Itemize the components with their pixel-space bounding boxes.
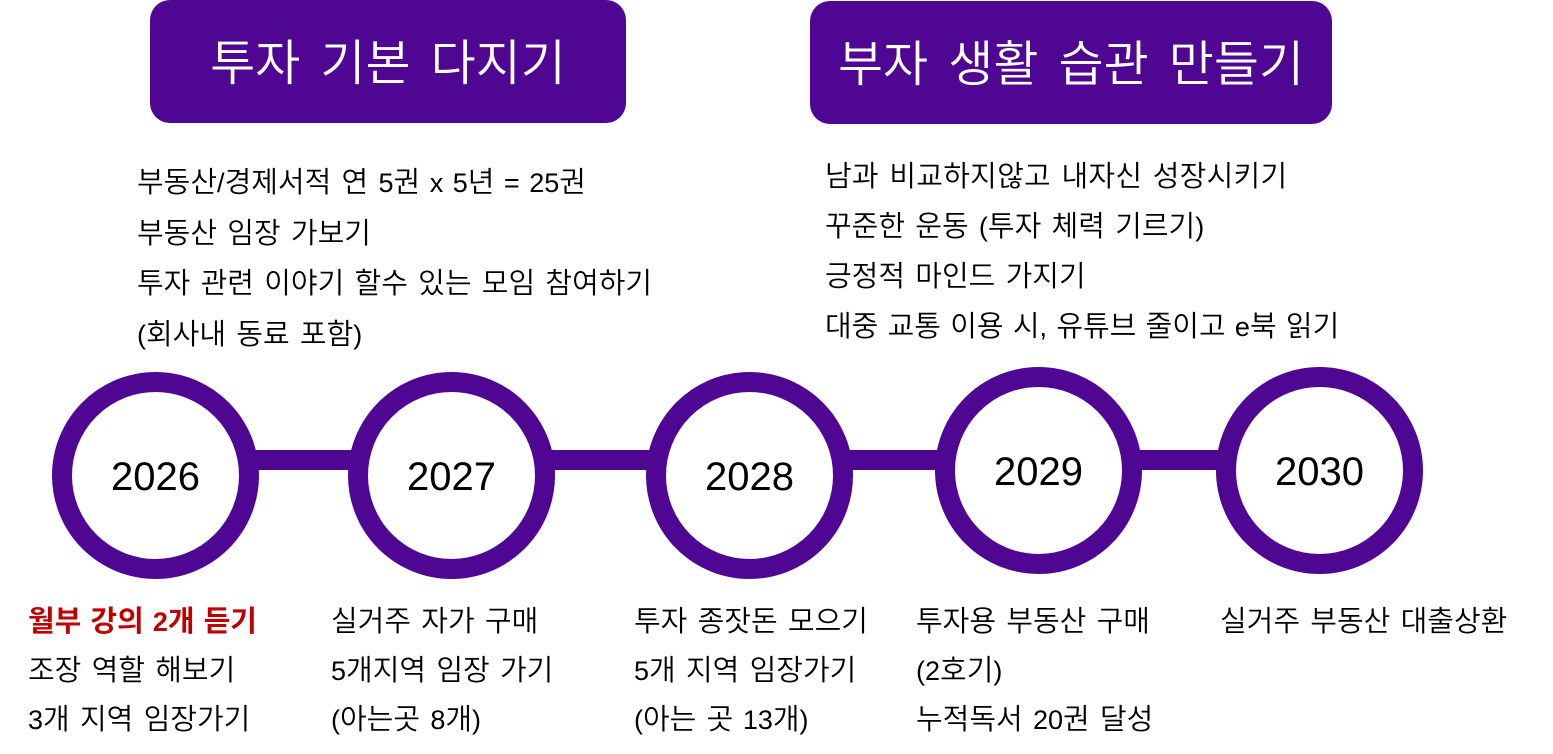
heading: 부자 생활 습관 만들기: 부자 생활 습관 만들기 (838, 38, 1304, 92)
circle: 2026: 2026 (111, 455, 200, 499)
circle: 2028 (646, 372, 853, 579)
circle: 2030: 2030 (1275, 450, 1364, 494)
circle: 2027: 2027 (407, 455, 496, 499)
text block: basics list: 부동산/경제서적 연 5권 x 5년 = 25권 부동산 임장 가보기 투자 관련 이야기 할수 있는 모임 참여하기 (회사내 동료 포함) (137, 167, 652, 351)
circle: 2029: 2029 (994, 450, 1083, 494)
connector 2029-2030 (1135, 450, 1225, 470)
text block: habits list: 남과 비교하지않고 내자신 성장시키기 꾸준한 운동 (투자 체력 기르기) 긍정적 마인드 가지기 대중 교통 이용 시, 유튜브 줄이고 e북 읽기 (825, 161, 1339, 343)
circle: 2030 (1216, 367, 1423, 574)
text block: 2026 goals: 월부 강의 2개 듣기 조장 역할 해보기 3개 지역 임장가기 (28, 606, 257, 736)
connector 2028-2029 (845, 450, 945, 470)
circle: 2026 (52, 372, 259, 579)
heading: 투자 기본 다지기: 투자 기본 다지기 (210, 37, 566, 91)
circle: 2029 (935, 367, 1142, 574)
text block: 2030 goals: 실거주 부동산 대출상환 (1220, 606, 1507, 638)
circle: 2027 (348, 372, 555, 579)
heading: 투자 기본 다지기 (150, 0, 626, 123)
circle: 2028: 2028 (705, 455, 794, 499)
heading: 부자 생활 습관 만들기 (810, 1, 1332, 124)
connector 2026-2027 (250, 450, 360, 470)
connector 2027-2028 (545, 450, 655, 470)
text block: 2027 goals: 실거주 자가 구매 5개지역 임장 가기 (아는곳 8개) (331, 606, 553, 736)
text block: 2029 goals: 투자용 부동산 구매 (2호기) 누적독서 20권 달성 (916, 606, 1153, 736)
text block: 2028 goals: 투자 종잣돈 모으기 5개 지역 임장가기 (아는 곳 13개) (634, 606, 868, 736)
